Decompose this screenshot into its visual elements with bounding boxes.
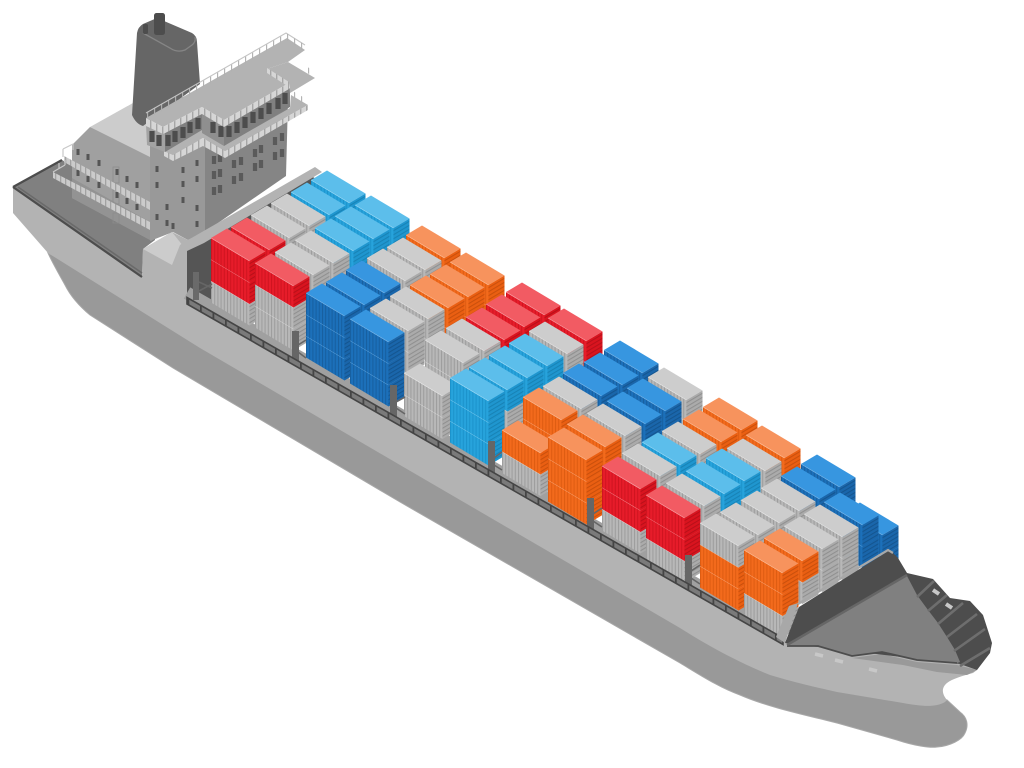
aft windows [78, 149, 137, 210]
tower left face [150, 140, 205, 241]
aft door outlines [113, 167, 119, 223]
aft wall base [72, 178, 152, 241]
bow deck [787, 576, 960, 663]
bridge side deck [267, 62, 315, 93]
platform front rail [173, 138, 203, 161]
container bay 2 [255, 196, 410, 350]
tower left windows [157, 160, 197, 229]
bow deck line [787, 646, 957, 663]
stern deck inner rim [18, 187, 142, 273]
roof far rail [146, 33, 286, 120]
wall segment front [165, 113, 202, 152]
small pipe [143, 24, 148, 34]
aft superstructure [53, 103, 152, 241]
funnel [132, 13, 200, 126]
tower [150, 100, 288, 241]
container bay 8 [548, 368, 702, 524]
container bay 11 [700, 454, 856, 610]
bulwark top edge [798, 550, 893, 604]
roof notch rail [267, 68, 289, 87]
deck rail [187, 298, 783, 644]
bow side plate [776, 603, 798, 643]
wall segment long [224, 88, 290, 146]
aft walkway upper [63, 144, 150, 210]
wall segment left [146, 125, 165, 152]
stern deck [14, 160, 155, 276]
main pipe [154, 13, 165, 35]
far gunwale strip [172, 167, 322, 251]
lashing posts [193, 272, 700, 588]
aft walkway lower [53, 160, 150, 230]
container bay 9 [602, 398, 758, 554]
container bay 12 [744, 492, 898, 638]
aft roof [90, 103, 152, 162]
container bay 7 [502, 340, 658, 496]
bow hatches [933, 590, 952, 608]
bridge [146, 33, 315, 161]
stern deck rim [13, 160, 142, 277]
bridge roof [146, 38, 305, 127]
container bay 5 [404, 282, 560, 439]
container bay 1 [211, 170, 366, 326]
funnel rim [143, 33, 195, 51]
bridge lower platform [164, 90, 308, 161]
container bay 6 [450, 308, 602, 466]
hull ports [815, 654, 877, 671]
bow ribs [917, 581, 990, 666]
cargo bay interior [187, 176, 318, 300]
wall segment return [202, 113, 224, 146]
bridge side deck rail [306, 66, 315, 78]
hull lower side [48, 253, 967, 747]
roof front rail [146, 118, 163, 134]
bow shaded flare [852, 654, 977, 675]
bow deck edge [787, 575, 907, 645]
aft wall [72, 127, 152, 241]
container bay 3 [306, 226, 460, 380]
tower right face [205, 100, 288, 232]
side bulkhead block [143, 232, 187, 265]
tower right windows [214, 133, 282, 195]
deck ledge [187, 293, 783, 634]
container bay 4 [350, 252, 504, 406]
bow bulwark [785, 550, 992, 670]
hull upper side [13, 187, 992, 706]
bow [776, 550, 992, 675]
container bay 10 [646, 426, 800, 582]
bridge windows [152, 93, 285, 146]
platform back rail [291, 90, 308, 106]
